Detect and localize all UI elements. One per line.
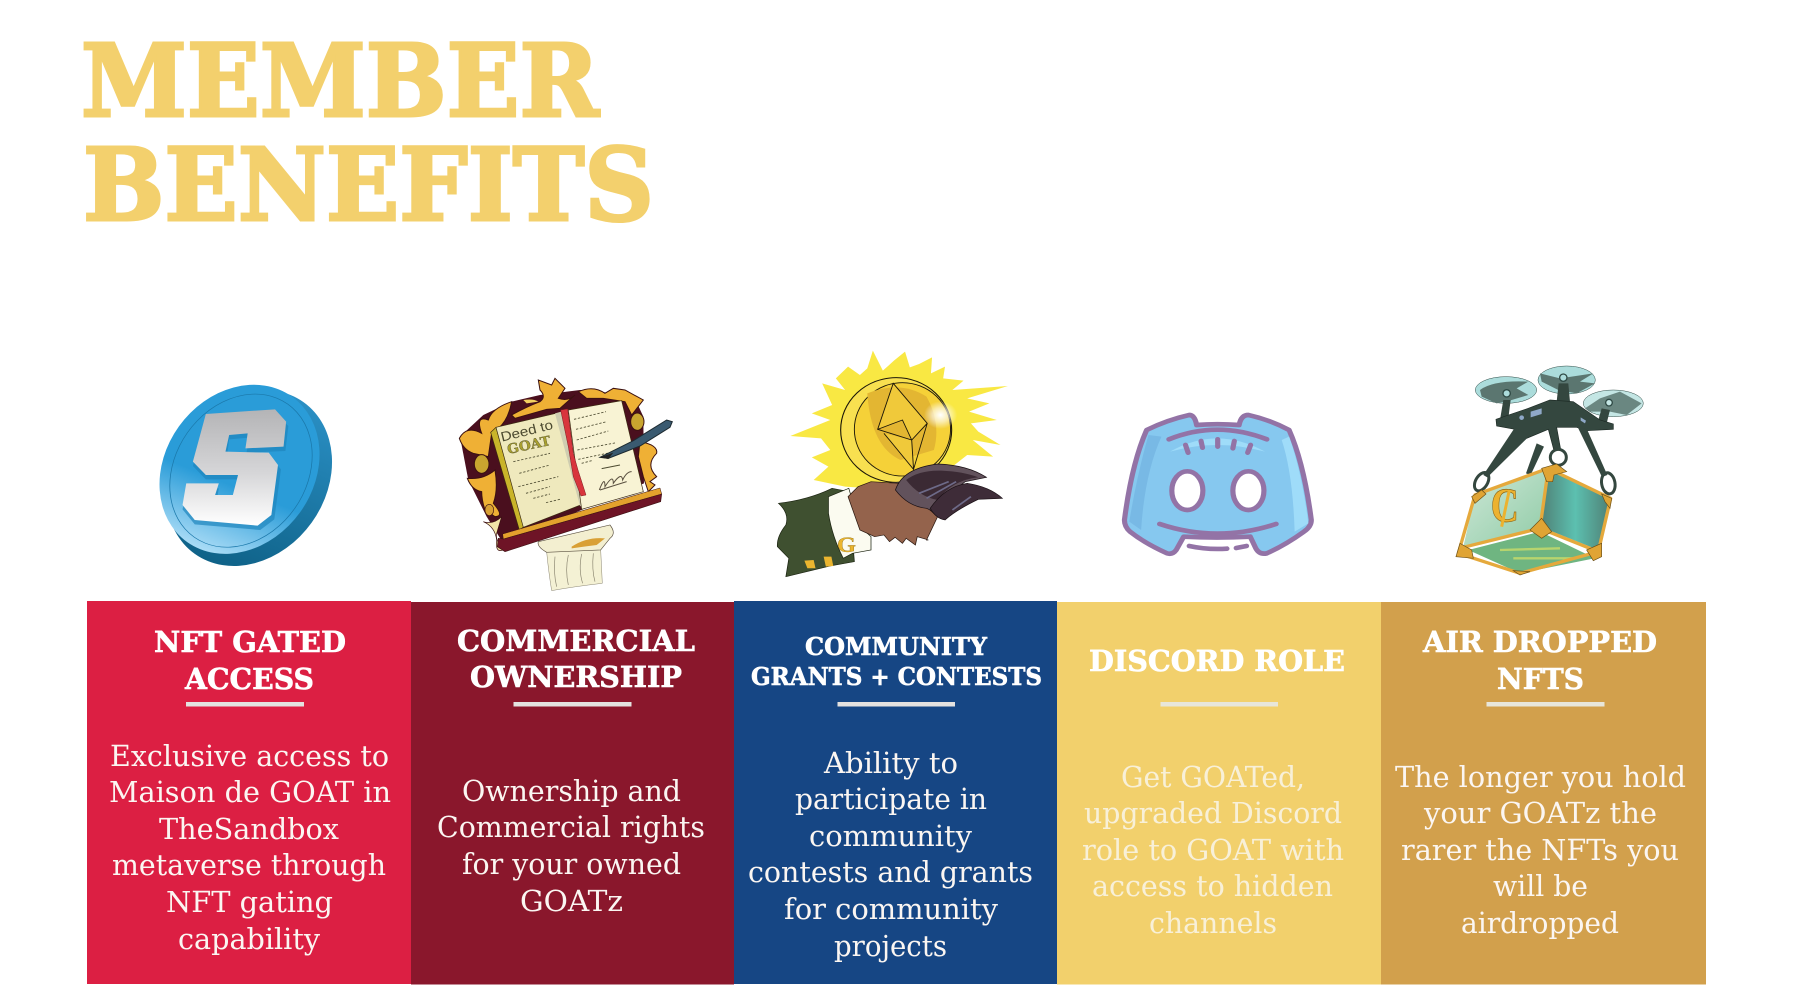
body text: Discord role: role to GOAT with: [1082, 833, 1344, 867]
body text: air dropped NFTs: The longer you hold: [1395, 760, 1686, 794]
body text: NFT gated access: Maison de GOAT in: [109, 775, 391, 809]
body text: NFT gated access: TheSandbox: [159, 812, 339, 846]
heading: commercial ownership: COMMERCIAL: [457, 624, 695, 658]
body text: air dropped NFTs: will be: [1493, 869, 1588, 903]
heading: NFT gated access: [154, 625, 346, 696]
body text: community grants and contests: for community: [784, 892, 999, 926]
icon: drone carrying crate: [1456, 366, 1643, 575]
icon: deed to GOAT book: Deed to: [499, 417, 554, 445]
body text: commercial ownership: [437, 774, 705, 918]
body text: air dropped NFTs: your GOATz the: [1423, 796, 1657, 830]
icon: Sandbox coin: [130, 362, 362, 590]
panel: Discord role: [1057, 602, 1381, 984]
heading: community grants and contests: [751, 632, 1042, 691]
body text: Discord role: access to hidden: [1092, 869, 1333, 903]
heading: Discord role: DISCORD ROLE: [1089, 644, 1345, 678]
heading: air dropped NFTs: [1422, 625, 1657, 696]
body text: community grants and contests: Ability to: [823, 746, 958, 780]
title: BENEFITS: [83, 126, 654, 244]
heading: commercial ownership: OWNERSHIP: [470, 660, 682, 694]
body text: NFT gated access: [109, 739, 391, 956]
panel: air dropped NFTs: [1381, 602, 1706, 984]
panel: commercial ownership: [411, 602, 734, 984]
body text: air dropped NFTs: airdropped: [1461, 906, 1619, 940]
title: MEMBER: [81, 22, 600, 140]
icon: drone carrying crate: C: [1491, 480, 1519, 533]
icon: Ethereum coin in goat hand: [777, 351, 1008, 577]
body text: community grants and contests: projects: [834, 929, 947, 963]
body text: Discord role: channels: [1149, 906, 1277, 940]
heading: community grants and contests: GRANTS + CONTESTS: [751, 662, 1042, 691]
icon: Ethereum coin in goat hand: G: [837, 533, 856, 558]
icon: deed to GOAT book: [459, 378, 672, 591]
body text: NFT gated access: Exclusive access to: [110, 739, 389, 773]
body text: community grants and contests: participate in: [795, 782, 987, 816]
panel: community grants and contests: [734, 601, 1057, 984]
icon: Discord logo: [1124, 415, 1311, 554]
title: [81, 22, 654, 244]
body text: Discord role: Get GOATed,: [1121, 760, 1305, 794]
body text: NFT gated access: capability: [178, 922, 321, 956]
body text: NFT gated access: metaverse through: [112, 848, 386, 882]
body text: community grants and contests: community: [809, 819, 973, 853]
body text: commercial ownership: Ownership and: [462, 774, 681, 808]
body text: NFT gated access: NFT gating: [166, 885, 333, 919]
heading: air dropped NFTs: AIR DROPPED: [1422, 625, 1657, 659]
icon: deed to GOAT book: GOAT: [506, 433, 552, 458]
heading: NFT gated access: ACCESS: [184, 662, 314, 696]
body text: Discord role: upgraded Discord: [1084, 796, 1342, 830]
body text: community grants and contests: contests and grants: [748, 855, 1033, 889]
body text: commercial ownership: Commercial rights: [437, 810, 705, 844]
panel: NFT gated access: [87, 601, 411, 984]
body text: air dropped NFTs: [1395, 760, 1686, 940]
body text: community grants and contests: [748, 746, 1033, 963]
body text: commercial ownership: for your owned: [462, 847, 681, 881]
heading: community grants and contests: COMMUNITY: [805, 632, 987, 661]
heading: air dropped NFTs: NFTS: [1497, 662, 1584, 696]
body text: Discord role: [1082, 760, 1344, 940]
body text: commercial ownership: GOATz: [520, 884, 623, 918]
body text: air dropped NFTs: rarer the NFTs you: [1401, 833, 1679, 867]
heading: commercial ownership: [457, 624, 695, 694]
heading: NFT gated access: NFT GATED: [154, 625, 346, 659]
